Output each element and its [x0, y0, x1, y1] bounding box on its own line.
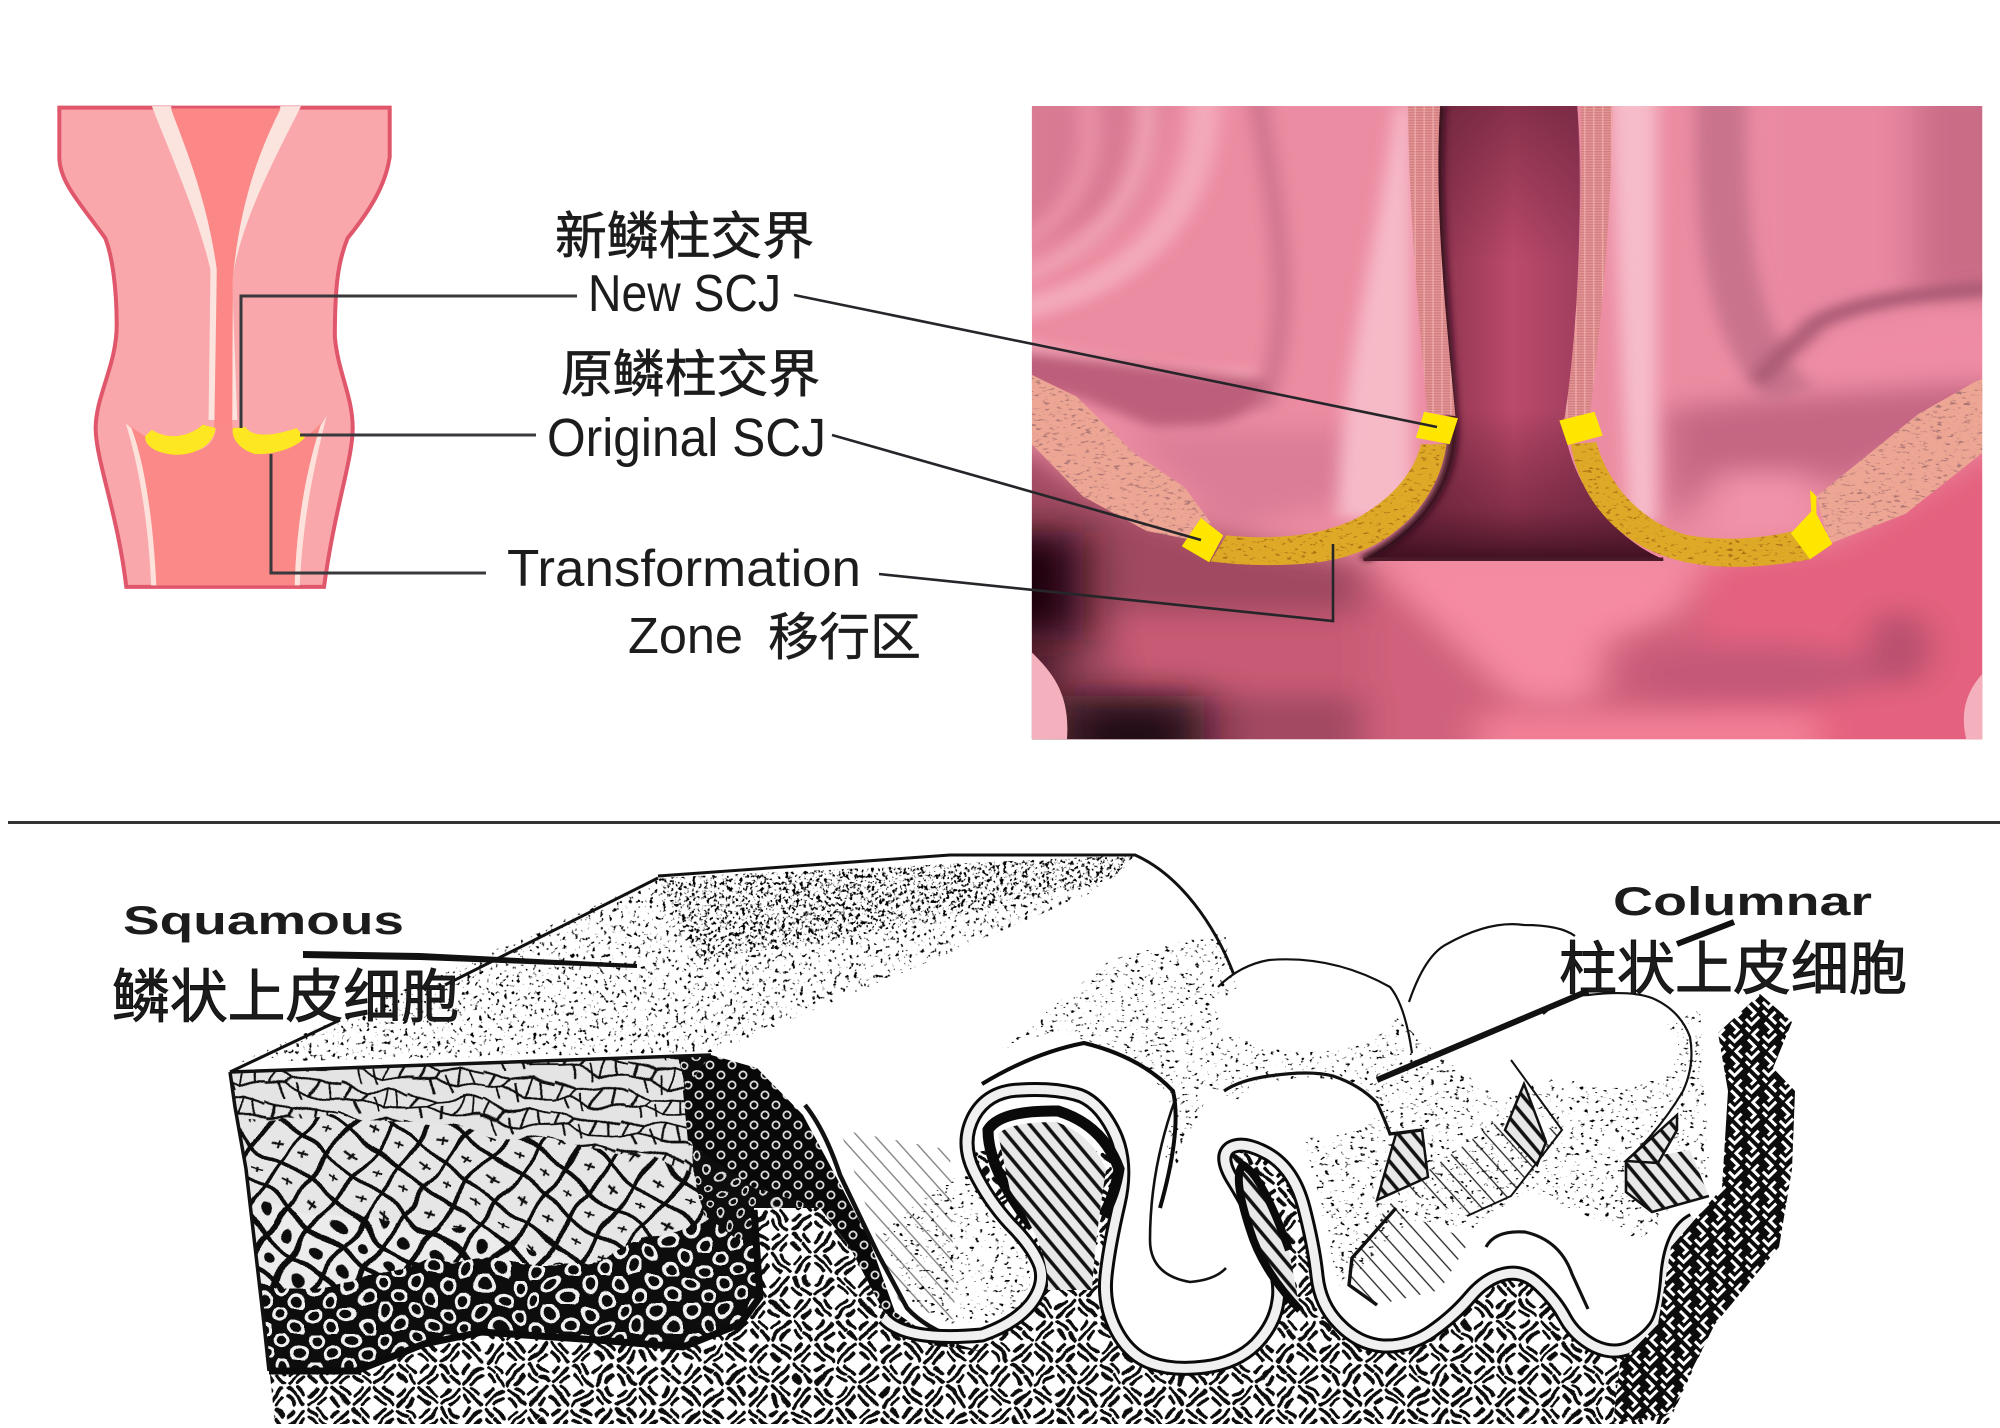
label: transformation zone: Zone: [628, 607, 743, 664]
soft mucosal masses and vaginal wall: [1032, 106, 1982, 740]
yellow markers: [1182, 412, 1832, 562]
label: new SCJ: New SCJ: [588, 265, 781, 323]
white bump highlights: [985, 944, 1679, 1360]
white columnar epithelium strips: [152, 106, 301, 420]
columnar epithelium bands: [1408, 106, 1612, 418]
divider line: [8, 821, 2000, 824]
bottom corner highlights: [1032, 652, 1982, 739]
leader lines: left diagram: [241, 296, 577, 573]
basement membrane of squamous layer: [269, 1210, 760, 1371]
outer cervical wall: [59, 108, 390, 587]
mucosal fold strokes: [1032, 106, 1982, 524]
label: new SCJ: [555, 208, 814, 323]
endocervical canal: [1364, 106, 1663, 559]
leader lines: painting: [794, 295, 1437, 621]
white squamous lines: [126, 416, 327, 585]
canal base line: [1364, 558, 1664, 561]
label: transformation zone: [507, 540, 921, 666]
label: transformation zone: 移行区: [768, 609, 921, 666]
label: columnar epithelium: [1559, 880, 1907, 1002]
label: squamous epithelium: 鳞状上皮细胞: [112, 965, 459, 1030]
upper canal: [171, 108, 281, 428]
yellow crescents: original squamocolumnar junction: [145, 425, 305, 455]
squamous epithelium bands: [1032, 375, 1982, 544]
fold edge line: [805, 1105, 960, 1340]
arrow: columnar pointer: [1377, 922, 1734, 1080]
dark shadow corners: [1032, 504, 1244, 740]
panel: cervix cross-section diagram: [59, 106, 390, 587]
crypts and fold contours: [982, 924, 1709, 1309]
transformation zone gold bands: [1210, 442, 1810, 567]
panel: cervix anatomical painting: [1032, 106, 1982, 740]
label: original SCJ: [547, 346, 826, 468]
painting background: [1032, 106, 1982, 739]
columnar folds: pale epithelial cell band: [884, 1090, 1693, 1368]
columnar folds: surface outline: [884, 1090, 1693, 1368]
squamous epithelium cell layers: [232, 1055, 820, 1368]
right dark stroma band: [1613, 994, 1795, 1424]
label: columnar epithelium: 柱状上皮细胞: [1559, 937, 1907, 1002]
lower canal: [126, 416, 327, 585]
label: squamous epithelium: Squamous: [123, 899, 404, 943]
stippled squamous surface: [230, 855, 1234, 1072]
papilla interiors: [988, 1111, 1300, 1310]
stippled surface of folds: [840, 930, 1710, 1360]
label: new SCJ: 新鳞柱交界: [555, 208, 814, 265]
arrow: squamous pointer: [303, 951, 637, 968]
label: original SCJ: Original SCJ: [547, 408, 826, 468]
label: transformation zone: Transformation: [507, 540, 861, 598]
label: original SCJ: 原鳞柱交界: [561, 346, 820, 403]
engraving: epithelium histology: [200, 855, 1795, 1428]
dark fold at squamocolumnar transition: [683, 1055, 980, 1351]
label: squamous epithelium: [112, 899, 459, 1030]
label: columnar epithelium: Columnar: [1613, 880, 1872, 924]
connective tissue stroma: [200, 1150, 1760, 1428]
squamous front outline: [230, 1055, 711, 1371]
